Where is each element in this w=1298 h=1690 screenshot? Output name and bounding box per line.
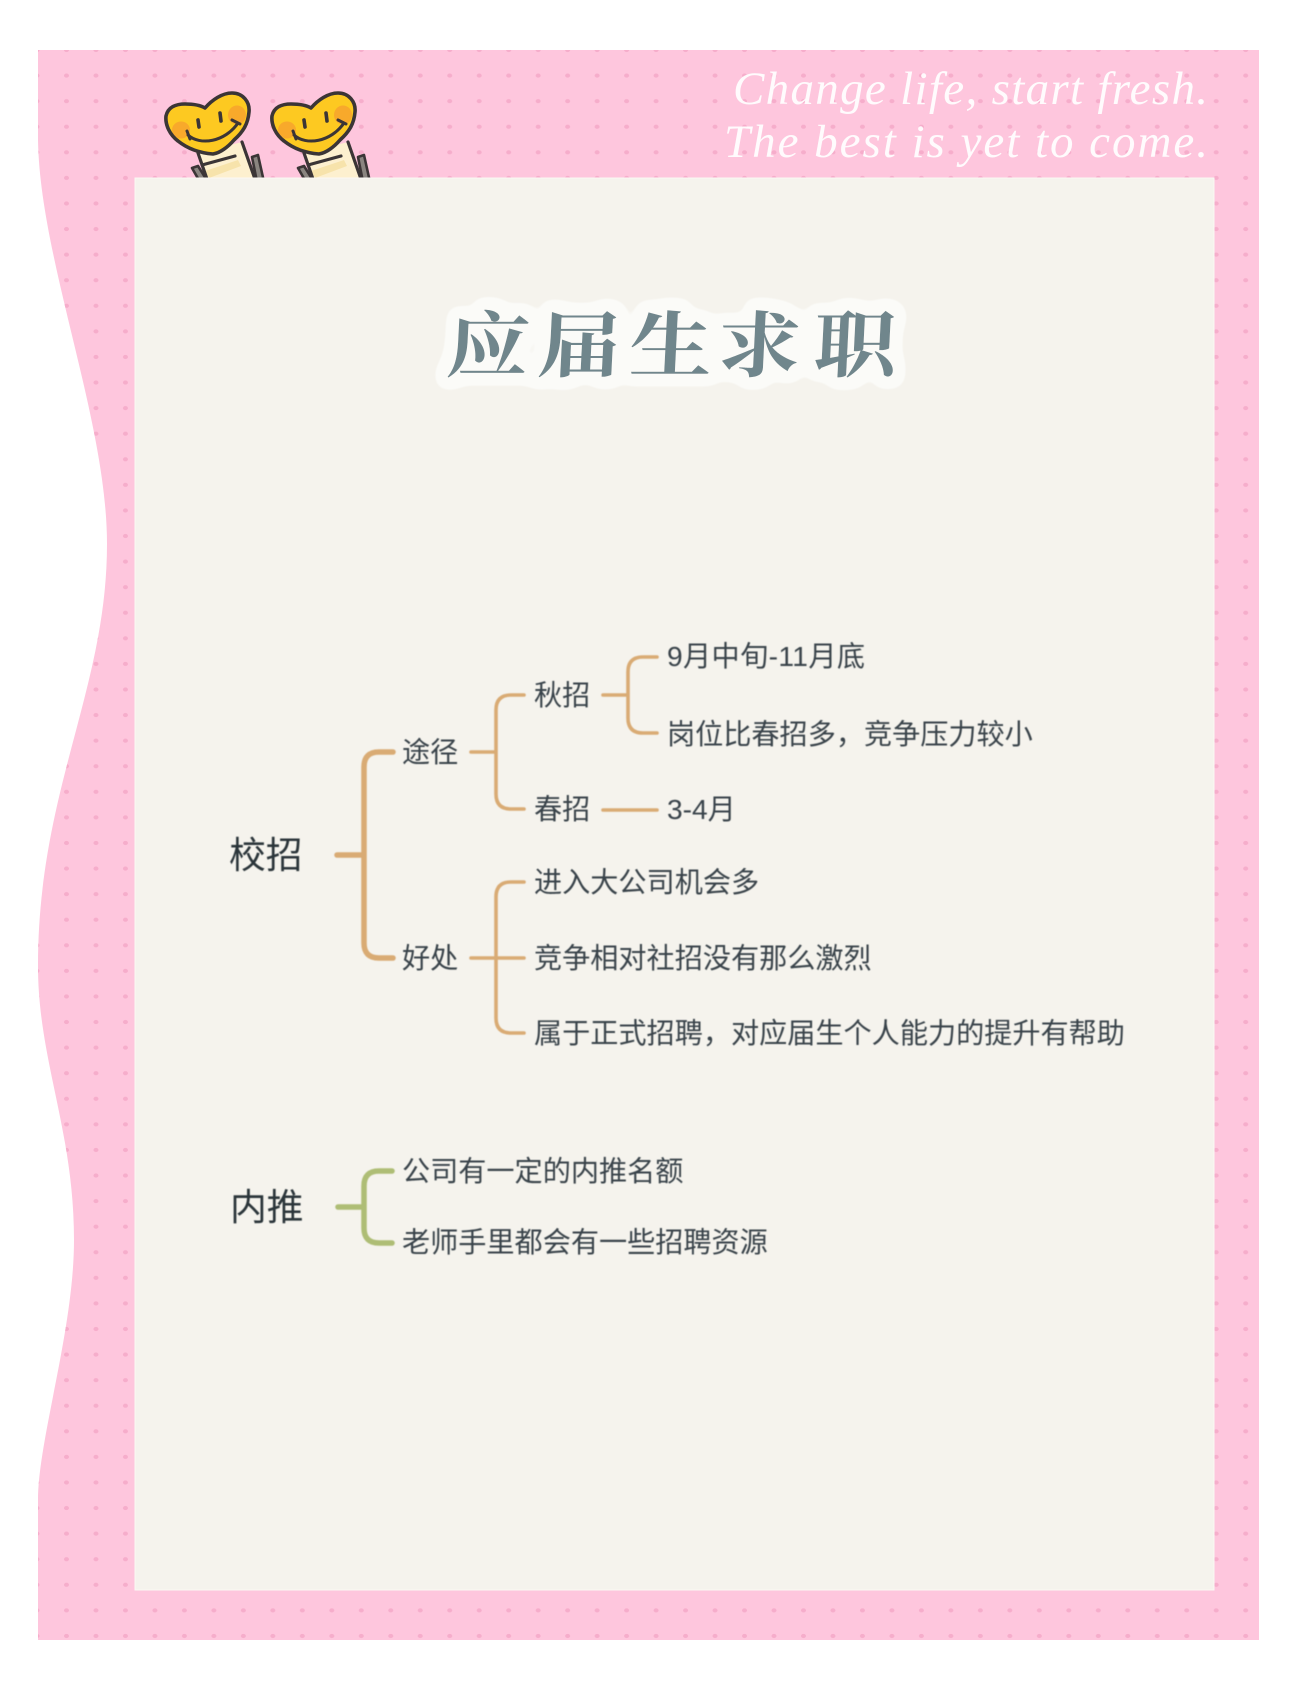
tagline: script English text: The best is yet to come.	[724, 116, 1208, 168]
title: 应届生求职	[445, 307, 905, 387]
bracket: 秋招 connector	[603, 657, 657, 733]
text: referral one: 公司有一定的内推名额	[402, 1156, 683, 1187]
label: 春招: 春招	[534, 794, 590, 825]
bracket: 好处 connector	[471, 882, 524, 1033]
label: 好处: 好处	[402, 943, 458, 974]
label: 秋招: 秋招	[534, 680, 590, 711]
mind map: campus recruiting branch	[229, 641, 1125, 1049]
icon: smiley heart character left	[166, 93, 264, 182]
text: autumn note: 岗位比春招多，竞争压力较小	[667, 719, 1033, 750]
text: benefit one: 进入大公司机会多	[534, 867, 759, 898]
tagline: script English text	[724, 63, 1208, 168]
text: referral two: 老师手里都会有一些招聘资源	[402, 1227, 768, 1258]
panel: cream paper card	[135, 178, 1214, 1590]
heading: 校招: 校招	[229, 835, 303, 876]
tagline: script English text: Change life, start fresh.	[733, 63, 1208, 115]
heading: 内推: 内推	[230, 1187, 304, 1228]
text: autumn dates: 9月中旬-11月底	[667, 641, 865, 672]
text: spring dates: 3-4月	[667, 794, 736, 825]
text: benefit three: 属于正式招聘，对应届生个人能力的提升有帮助	[534, 1018, 1125, 1049]
label: 途径: 途径	[402, 737, 458, 768]
bracket: 校招 connector	[337, 752, 393, 958]
icon: smiley heart character right	[272, 93, 370, 182]
bracket: 途径 connector	[471, 695, 524, 809]
line: 春招 connector	[603, 808, 657, 812]
text: benefit two: 竞争相对社招没有那么激烈	[534, 943, 872, 974]
mind map: internal referral branch	[230, 1156, 768, 1258]
bracket: 内推 connector	[338, 1171, 392, 1243]
